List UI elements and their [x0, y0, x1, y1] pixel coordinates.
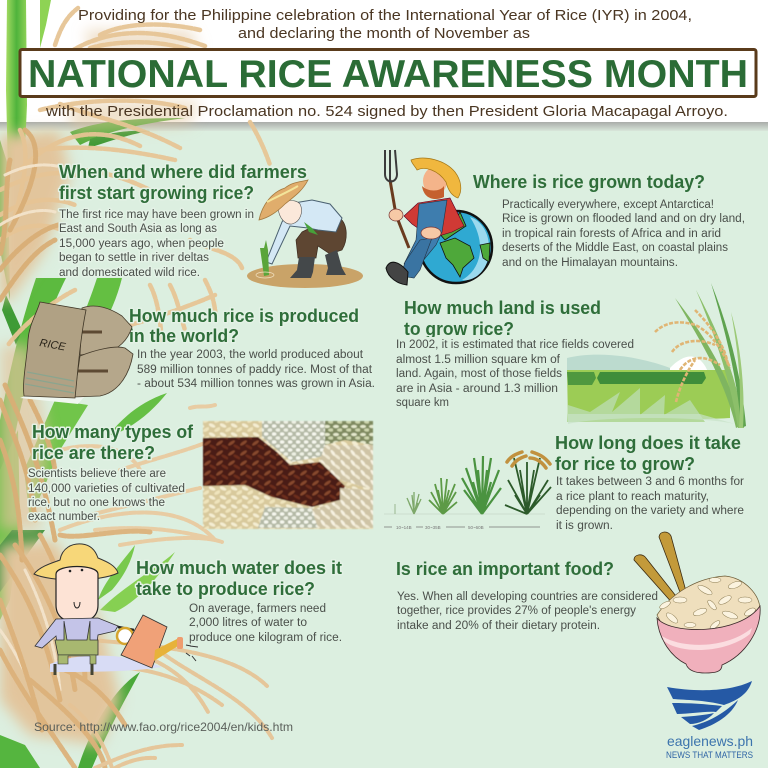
icon: rice sacks: RICE	[38, 337, 67, 354]
heading: When and where did farmers	[59, 162, 307, 182]
heading	[404, 298, 601, 339]
plant stage 2	[407, 492, 421, 514]
body text: land. Again, most of those fields	[396, 368, 562, 380]
heading: How long does it take	[555, 433, 741, 453]
photo: varieties of rice	[203, 421, 373, 529]
body text: together, rice provides 27% of people's energy	[397, 605, 636, 617]
body text: and on the Himalayan mountains.	[502, 257, 678, 269]
background rice plant	[0, 0, 272, 768]
heading	[59, 162, 307, 203]
logo: eaglenews.ph: NEWS THAT MATTERS	[666, 750, 753, 760]
body text: In 2002, it is estimated that rice fields covered	[396, 339, 634, 351]
panel: how much water	[136, 558, 342, 644]
heading: in the world?	[129, 326, 239, 346]
body text: In the year 2003, the world produced about	[137, 349, 364, 361]
body text: deserts of the Middle East, on coastal plains	[502, 242, 728, 254]
body text: The first rice may have been grown in	[59, 209, 254, 221]
body text: and domesticated wild rice.	[59, 267, 200, 279]
icon: farmer with watering can	[34, 544, 198, 675]
heading: How much rice is produced	[129, 306, 359, 326]
body text: Practically everywhere, except Antarctica!	[502, 199, 714, 211]
body text	[396, 337, 636, 409]
body text: Scientists believe there are	[28, 468, 166, 480]
body text: 589 million tonnes of paddy rice. Most of that	[137, 364, 373, 376]
heading: take to produce rice?	[136, 579, 315, 599]
heading	[136, 558, 342, 599]
panel: where is rice grown today	[473, 172, 745, 269]
heading: rice are there?	[32, 443, 155, 463]
heading	[555, 433, 741, 474]
heading: to grow rice?	[404, 319, 514, 339]
growth axis: 50~60B	[468, 525, 484, 530]
growth axis: 10~14B	[396, 525, 412, 530]
heading: first start growing rice?	[59, 183, 254, 203]
body text: - about 534 million tonnes was grown in Asia.	[137, 378, 375, 390]
plant stage 5	[505, 452, 551, 514]
header intro text: and declaring the month of November as	[238, 25, 530, 42]
icon: eagle wing	[667, 681, 752, 730]
header background	[0, 0, 768, 131]
heading	[129, 306, 359, 346]
body text: a rice plant to reach maturity,	[556, 491, 709, 503]
title banner: NATIONAL RICE AWARENESS MONTH	[28, 53, 748, 96]
body text: produce one kilogram of rice.	[189, 632, 342, 644]
rice panicles	[0, 8, 272, 768]
body text: rice, but no one knows the	[28, 497, 165, 509]
header intro text	[78, 7, 692, 42]
body text: in tropical rain forests of Africa and in arid	[502, 228, 721, 240]
heading	[32, 422, 194, 463]
body text: 2,000 litres of water to	[189, 617, 307, 629]
icon: farmer leaning on globe	[385, 150, 492, 285]
logo: eaglenews.ph: eaglenews.ph	[667, 733, 753, 749]
icon: farmer planting rice	[247, 180, 363, 288]
panel: when and where	[59, 162, 307, 279]
body text: are in Asia - around 1.3 million	[396, 383, 558, 395]
body text	[189, 603, 342, 644]
growth axis	[384, 525, 540, 530]
heading: How much water does it	[136, 558, 342, 578]
body text: 140,000 varieties of cultivated	[28, 483, 185, 495]
icon: bowl of rice with chopsticks	[634, 532, 760, 673]
heading: How much land is used	[404, 298, 601, 318]
body text: began to settle in river deltas	[59, 252, 209, 264]
icon: rice sacks	[20, 302, 133, 404]
body text: East and South Asia as long as	[59, 223, 217, 235]
panel: how much rice produced	[129, 306, 375, 390]
body text	[502, 199, 745, 269]
plant stage 4	[462, 456, 501, 514]
header intro text: Providing for the Philippine celebration of the International Year of Rice (IYR) in 2004,	[78, 7, 692, 24]
heading: Is rice an important food?	[396, 559, 614, 579]
rice grain masses	[0, 30, 200, 745]
body text: it is grown.	[556, 520, 613, 532]
body text	[397, 591, 658, 632]
body text: On average, farmers need	[189, 603, 326, 615]
body text	[28, 468, 185, 523]
chart: rice plant growth stages	[384, 452, 551, 530]
plant stage 1	[394, 504, 396, 514]
body text	[137, 349, 375, 390]
body text	[59, 209, 254, 279]
body text	[556, 476, 744, 532]
plant stage 3	[429, 478, 457, 514]
leaves	[0, 0, 185, 768]
growth axis: 30~35B	[425, 525, 441, 530]
body text: Yes. When all developing countries are considered	[397, 591, 658, 603]
body text: exact number.	[28, 511, 100, 523]
illustration: rice field with plant	[567, 283, 746, 428]
panel: how much land	[396, 298, 636, 409]
body text: almost 1.5 million square km of	[396, 354, 561, 366]
proclamation line: with the Presidential Proclamation no. 524 signed by then President Gloria Macapagal Arroyo.	[45, 103, 728, 120]
body text: Rice is grown on flooded land and on dry land,	[502, 213, 745, 225]
body text: 15,000 years ago, when people	[59, 238, 224, 250]
logo: eaglenews.ph	[666, 681, 753, 760]
heading: Where is rice grown today?	[473, 172, 705, 192]
panel: is rice an important food	[396, 559, 658, 632]
heading: How many types of	[32, 422, 194, 442]
heading: for rice to grow?	[555, 454, 695, 474]
body text: intake and 20% of their dietary protein.	[397, 620, 600, 632]
body text: square km	[396, 397, 449, 409]
body text: It takes between 3 and 6 months for	[556, 476, 744, 488]
panel: how long does it take	[555, 433, 744, 532]
source note: Source: http://www.fao.org/rice2004/en/kids.htm	[34, 720, 293, 734]
body text: depending on the variety and where	[556, 505, 744, 517]
panel: how many types	[28, 422, 194, 523]
